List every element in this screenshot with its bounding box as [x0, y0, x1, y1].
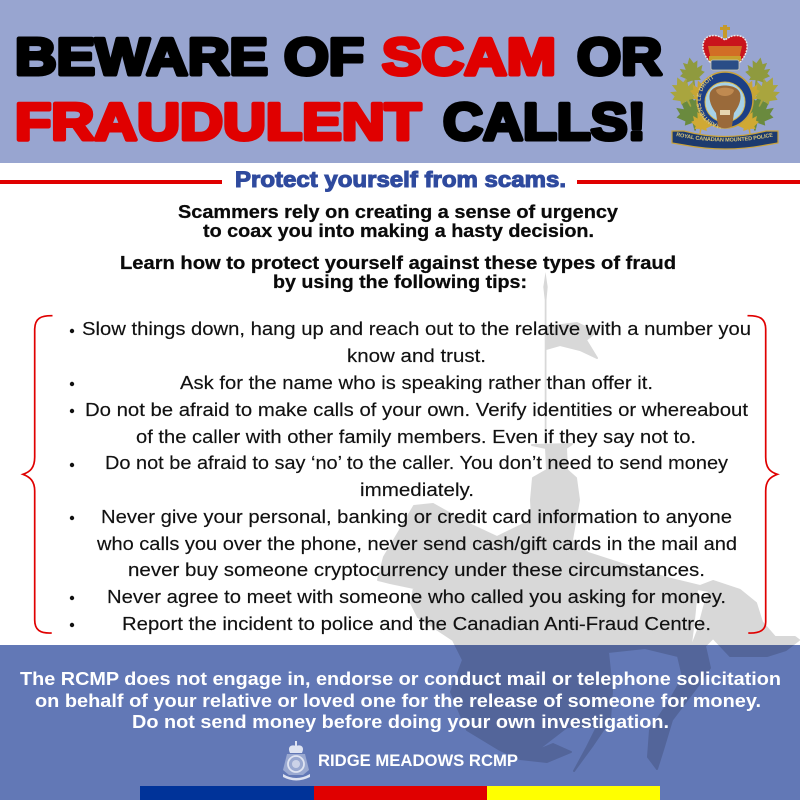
tips list: immediately.: [360, 479, 474, 500]
banner: [672, 131, 778, 149]
title: SCAM: [382, 29, 556, 87]
tricolour bar: [140, 786, 660, 800]
divider left: [0, 180, 222, 184]
intro text: [120, 202, 676, 292]
icon: RCMP crest: [670, 25, 780, 150]
bullets: [70, 329, 74, 627]
footer notice: Do not send money before doing your own investigation.: [132, 711, 669, 732]
subheading: Protect yourself from scams.: [235, 167, 566, 192]
icon: RCMP crest: ROYAL CANADIAN MOUNTED POLICE: [676, 132, 773, 142]
tips list: Ask for the name who is speaking rather than offer it.: [180, 372, 653, 393]
intro text: by using the following tips:: [273, 272, 527, 292]
footer notice: The RCMP does not engage in, endorse or conduct mail or telephone solicitation: [20, 668, 781, 689]
icon: small white crest: [283, 741, 310, 780]
icon: crown: [703, 25, 747, 62]
panel: header band: [0, 0, 800, 163]
title: FRAUDULENT: [15, 94, 421, 152]
tips list: Never give your personal, banking or credit card information to anyone: [101, 506, 732, 527]
tips list: Slow things down, hang up and reach out to the relative with a number you: [82, 318, 751, 339]
intro text: Learn how to protect yourself against these types of fraud: [120, 253, 676, 273]
title: CALLS!: [443, 94, 646, 152]
tips list: know and trust.: [347, 345, 486, 366]
icon: bison head: [709, 86, 741, 128]
tips list: [70, 318, 751, 634]
tips list: who calls you over the phone, never send cash/gift cards in the mail and: [96, 533, 737, 554]
divider right: [577, 180, 800, 184]
intro text: to coax you into making a hasty decision.: [203, 221, 594, 241]
tips list: of the caller with other family members. Even if they say not to.: [136, 426, 696, 447]
panel: footer band: [0, 645, 800, 800]
tips list: Do not be afraid to make calls of your own. Verify identities or whereabout: [85, 399, 748, 420]
tips list: never buy someone cryptocurrency under these circumstances.: [128, 559, 705, 580]
left brace: [23, 316, 52, 633]
footer notice: on behalf of your relative or loved one for the release of someone for money.: [35, 690, 761, 711]
tips list: Never agree to meet with someone who called you asking for money.: [107, 586, 726, 607]
intro text: Scammers rely on creating a sense of urgency: [178, 202, 618, 222]
title: BEWARE OF: [15, 29, 364, 87]
tips list: Do not be afraid to say ‘no’ to the caller. You don’t need to send money: [105, 452, 729, 473]
right brace: [748, 316, 777, 633]
motto ring text: MAINTIENS LE DROIT: [696, 74, 721, 129]
tips list: Report the incident to police and the Canadian Anti-Fraud Centre.: [122, 613, 711, 634]
watermark: mounted officer silhouette: [378, 272, 799, 771]
footer brand name: RIDGE MEADOWS RCMP: [318, 752, 518, 770]
footer notice: [20, 668, 781, 732]
title: [15, 29, 662, 152]
title: OR: [577, 29, 662, 87]
